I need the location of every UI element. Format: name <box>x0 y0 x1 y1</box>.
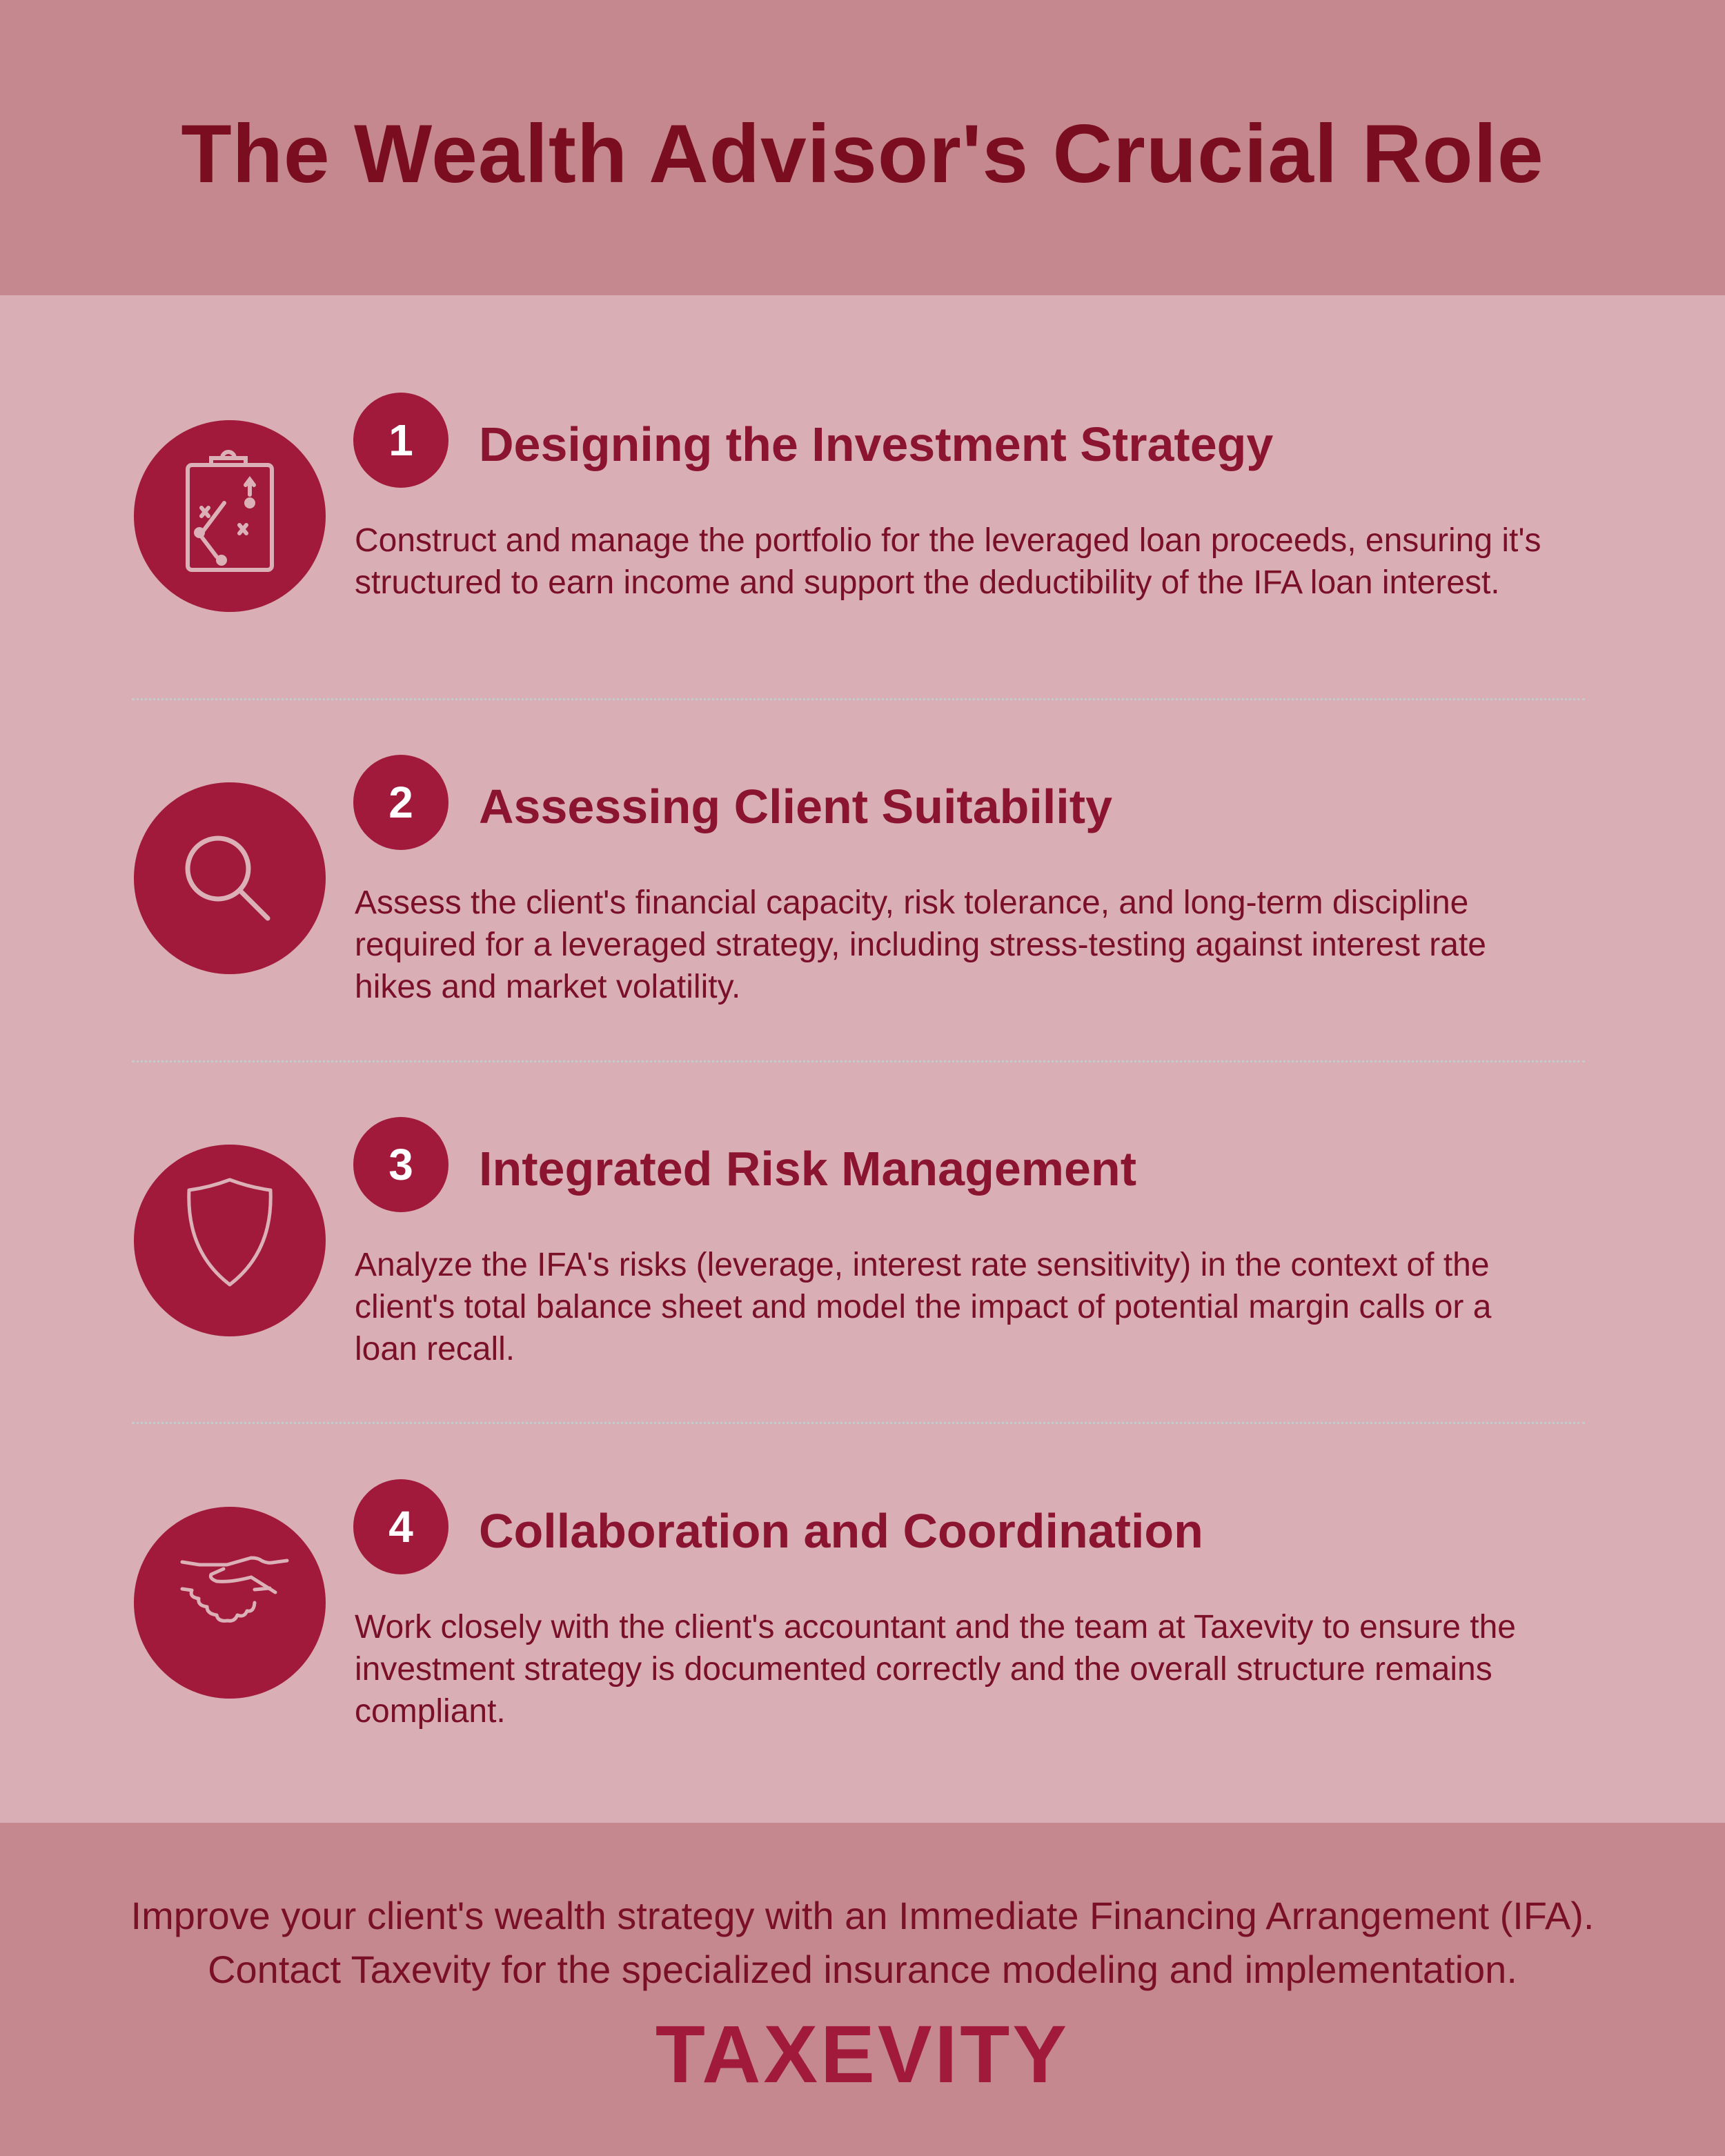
text 3 <box>355 1247 1492 1367</box>
text 3: Analyze the IFA's risks (leverage, interest rate sensitivity) in the context of the <box>355 1247 1490 1283</box>
text 4: investment strategy is documented correctly and the overall structure remains <box>355 1651 1492 1688</box>
number 1 <box>353 393 448 488</box>
text 4: Work closely with the client's accountant and the team at Taxevity to ensure the <box>355 1609 1516 1645</box>
number 4 <box>353 1479 448 1574</box>
logo: TAXEVITY <box>656 2009 1070 2100</box>
text 1: structured to earn income and support the deductibility of the IFA loan interest. <box>355 564 1500 601</box>
text 4 <box>355 1609 1516 1730</box>
icon: handshake <box>134 1507 326 1699</box>
icon: magnifier <box>134 782 326 974</box>
number 1: 1 <box>388 415 413 465</box>
number 3 <box>353 1117 448 1212</box>
text 1: Construct and manage the portfolio for the leveraged loan proceeds, ensuring it's <box>355 522 1541 559</box>
icon: clipboard strategy <box>134 420 326 612</box>
header band <box>0 0 1725 295</box>
text 2: hikes and market volatility. <box>355 969 740 1005</box>
number 4: 4 <box>388 1502 413 1552</box>
heading 4: Collaboration and Coordination <box>479 1504 1203 1558</box>
text 2: Assess the client's financial capacity, risk tolerance, and long-term discipline <box>355 884 1468 921</box>
text 4: compliant. <box>355 1693 506 1730</box>
number 2 <box>353 755 448 850</box>
text 2 <box>355 884 1486 1005</box>
text 1 <box>355 522 1541 601</box>
footer call to action <box>131 1894 1594 1991</box>
number 2: 2 <box>388 778 413 827</box>
footer call to action: Improve your client's wealth strategy with an Immediate Financing Arrangement (IFA). <box>131 1894 1594 1937</box>
number 3: 3 <box>388 1140 413 1189</box>
icon: shield <box>134 1145 326 1336</box>
title: The Wealth Advisor's Crucial Role <box>181 108 1544 200</box>
heading 2: Assessing Client Suitability <box>479 780 1112 833</box>
text 3: client's total balance sheet and model the impact of potential margin calls or a <box>355 1289 1491 1325</box>
footer call to action: Contact Taxevity for the specialized insurance modeling and implementation. <box>208 1948 1517 1991</box>
text 2: required for a leveraged strategy, including stress-testing against interest rate <box>355 927 1486 963</box>
heading 3: Integrated Risk Management <box>479 1142 1136 1196</box>
heading 1: Designing the Investment Strategy <box>479 417 1273 471</box>
footer band <box>0 1823 1725 2156</box>
text 3: loan recall. <box>355 1331 515 1367</box>
